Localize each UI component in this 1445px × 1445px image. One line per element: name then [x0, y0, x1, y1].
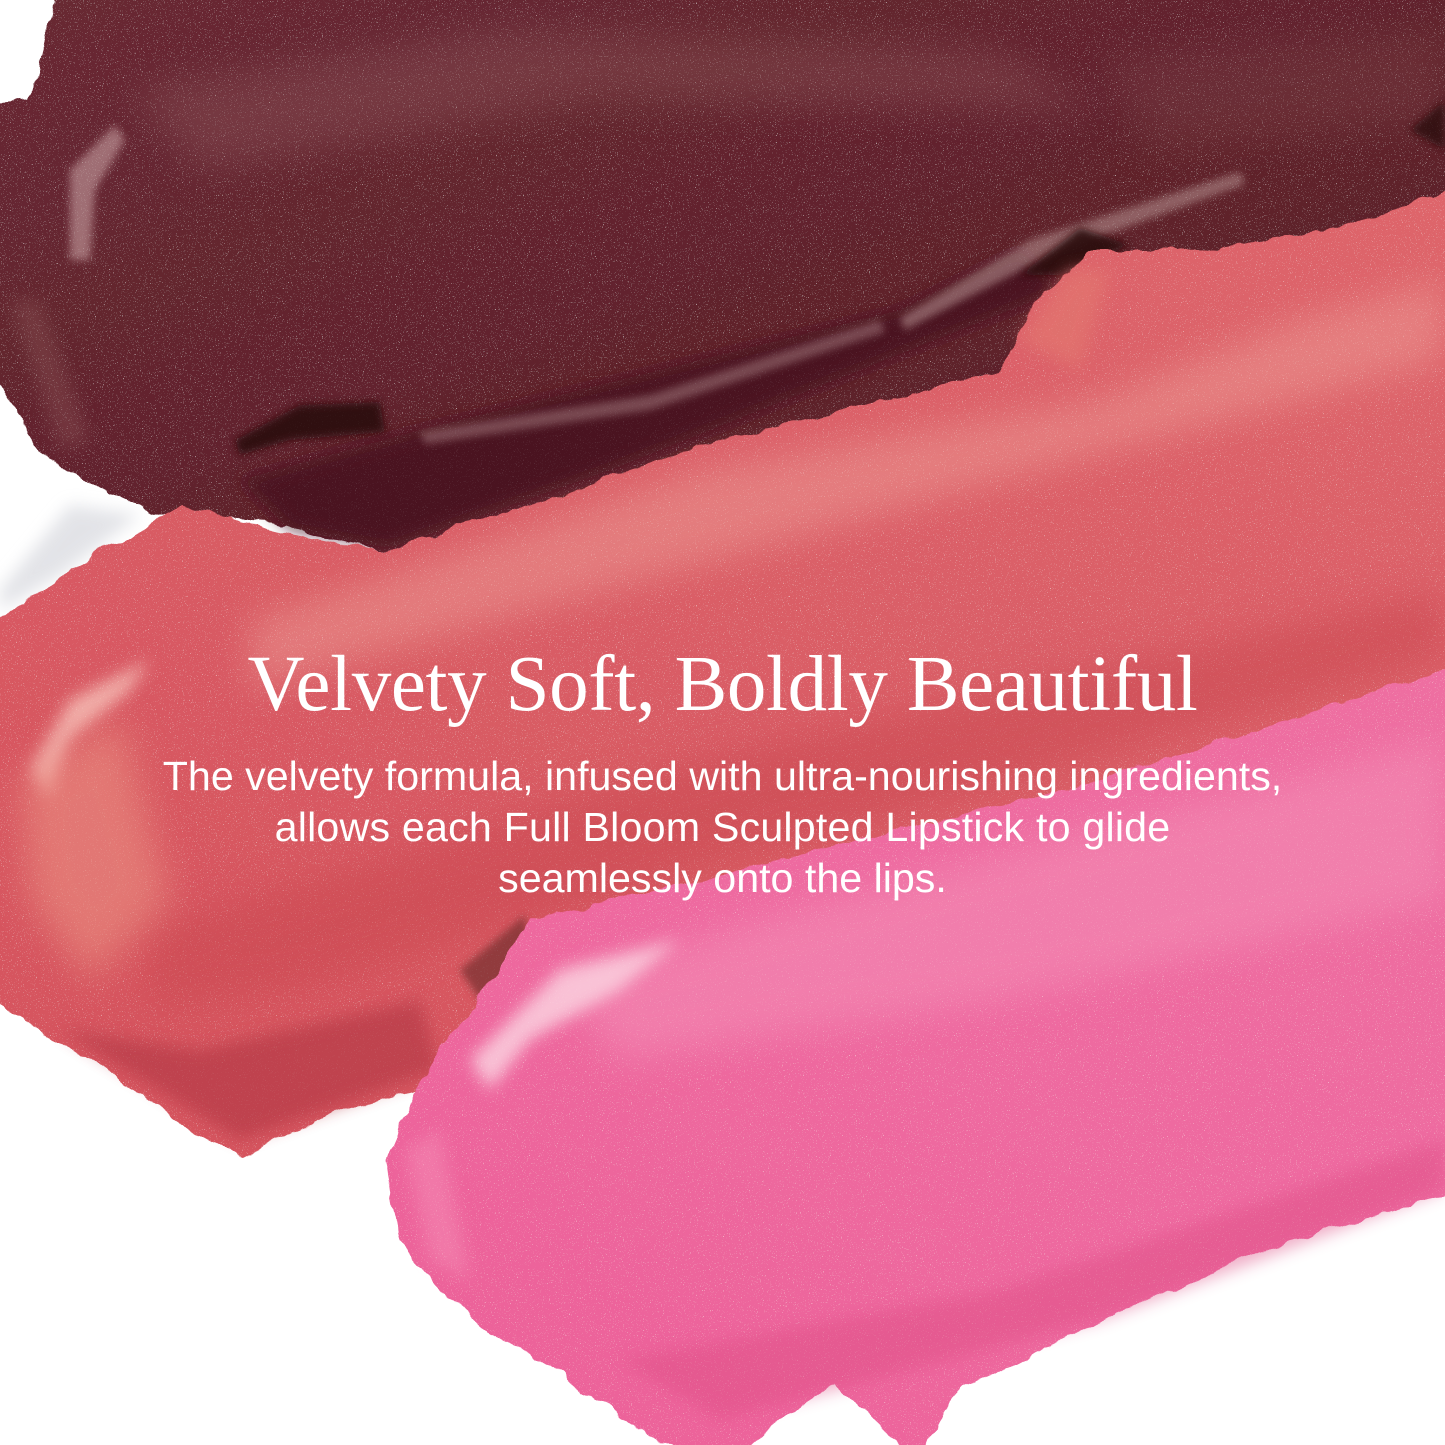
swatch: coral: [0, 165, 1445, 1158]
body text: The velvety formula, infused with ultra-nourishing ingredients,: [163, 753, 1282, 799]
body text: [163, 753, 1282, 901]
swatch: pink: [385, 645, 1445, 1445]
body text: allows each Full Bloom Sculpted Lipstick to glide: [275, 804, 1170, 850]
swatch: plum: [0, 0, 1445, 560]
body text: seamlessly onto the lips.: [498, 855, 947, 901]
soft shadow on white background: [0, 505, 140, 610]
heading: Velvety Soft, Boldly Beautiful: [248, 641, 1197, 728]
